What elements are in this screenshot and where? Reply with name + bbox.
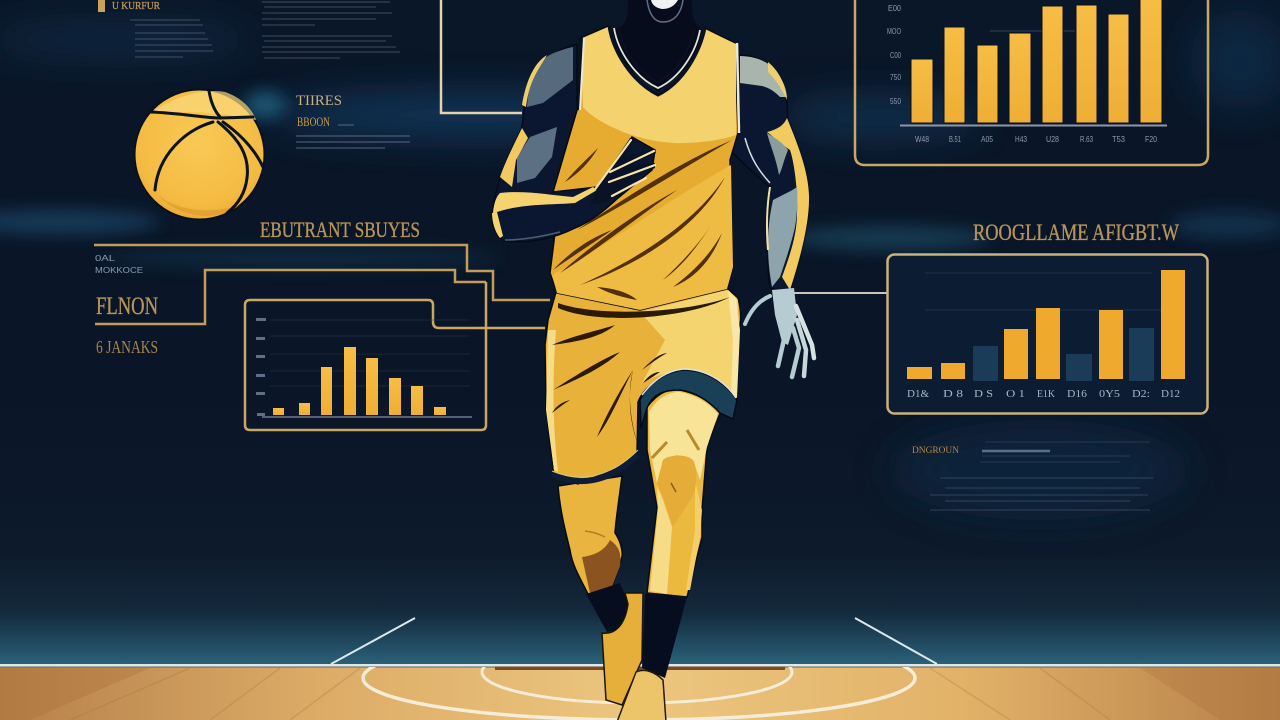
axis labels: MOO bbox=[887, 27, 901, 36]
x labels: O 1 bbox=[1006, 388, 1025, 400]
text block: left labels: 6 JANAKS bbox=[96, 337, 158, 357]
head and neck bbox=[612, 0, 702, 92]
axis labels bbox=[887, 4, 902, 106]
axis labels bbox=[256, 318, 266, 416]
shorts folds bbox=[552, 297, 730, 450]
top left note bbox=[98, 0, 213, 57]
x labels: 0Y5 bbox=[1099, 388, 1121, 400]
x labels: D2: bbox=[1132, 388, 1150, 400]
x labels: D1& bbox=[907, 388, 929, 400]
text block: tiires: TIIRES bbox=[296, 93, 342, 109]
text block: left labels bbox=[95, 254, 158, 357]
front sock bbox=[642, 594, 687, 678]
text block: bottom right bbox=[912, 442, 1153, 510]
axis labels: E00 bbox=[888, 4, 902, 13]
x labels bbox=[907, 388, 1180, 400]
x labels: H43 bbox=[1015, 135, 1027, 144]
top centre panel bbox=[441, 0, 522, 113]
x labels: T53 bbox=[1112, 135, 1126, 144]
top centre paragraph bbox=[262, 2, 400, 58]
x labels: B.51 bbox=[949, 135, 961, 144]
front leg bbox=[647, 389, 720, 597]
heading: left: EBUTRANT SBUYES bbox=[260, 217, 420, 242]
jersey bbox=[550, 26, 739, 310]
heading: right: ROOGLLAME AFIGBT.W bbox=[973, 220, 1179, 245]
connector lines: left panel bbox=[94, 245, 550, 324]
x labels: D16 bbox=[1067, 388, 1088, 400]
player figure bbox=[492, 0, 814, 720]
x labels: D12 bbox=[1161, 388, 1180, 400]
back sock bbox=[586, 583, 628, 632]
axis labels: C00 bbox=[890, 51, 901, 60]
back shoe bbox=[602, 593, 643, 705]
back leg bbox=[558, 476, 622, 594]
finger highlights bbox=[596, 140, 655, 196]
x labels bbox=[915, 135, 1157, 144]
axis labels: 550 bbox=[890, 97, 901, 106]
panel: top right bar chart bbox=[855, 0, 1208, 165]
x labels: E1K bbox=[1037, 388, 1055, 400]
axis labels: 750 bbox=[890, 73, 901, 82]
text block: left labels: FLNON bbox=[96, 293, 158, 320]
x labels: W48 bbox=[915, 135, 929, 144]
icon: basketball bbox=[134, 90, 264, 220]
x labels: F20 bbox=[1145, 135, 1157, 144]
left arm bbox=[492, 44, 656, 242]
text block: left labels: MOKKOCE bbox=[95, 266, 143, 275]
bars bbox=[273, 347, 446, 415]
left hand bbox=[590, 138, 656, 205]
shorts bbox=[545, 288, 741, 484]
text block: tiires bbox=[296, 93, 410, 148]
connector line: right panel bbox=[792, 292, 887, 294]
x labels: D S bbox=[974, 388, 993, 400]
panel: left bar chart bbox=[245, 282, 545, 430]
bars: muted bbox=[973, 328, 1154, 381]
right arm bbox=[730, 55, 809, 292]
front shoe bbox=[617, 670, 666, 720]
x labels: R.63 bbox=[1080, 135, 1093, 144]
x labels: U28 bbox=[1046, 135, 1059, 144]
top left note: U KURFUR bbox=[112, 0, 161, 12]
court floor bbox=[0, 618, 1280, 720]
x labels: D 8 bbox=[943, 388, 964, 400]
jersey folds bbox=[553, 140, 732, 300]
text block: tiires: BBOON bbox=[297, 114, 330, 129]
bars bbox=[911, 0, 1162, 123]
right hand bbox=[745, 288, 814, 377]
x labels: A05 bbox=[981, 135, 993, 144]
text block: bottom right: DNGROUN bbox=[912, 445, 960, 455]
panel: right bar chart bbox=[888, 254, 1208, 414]
bars: gold bbox=[907, 270, 1185, 379]
text block: left labels: 0AL bbox=[95, 254, 116, 263]
